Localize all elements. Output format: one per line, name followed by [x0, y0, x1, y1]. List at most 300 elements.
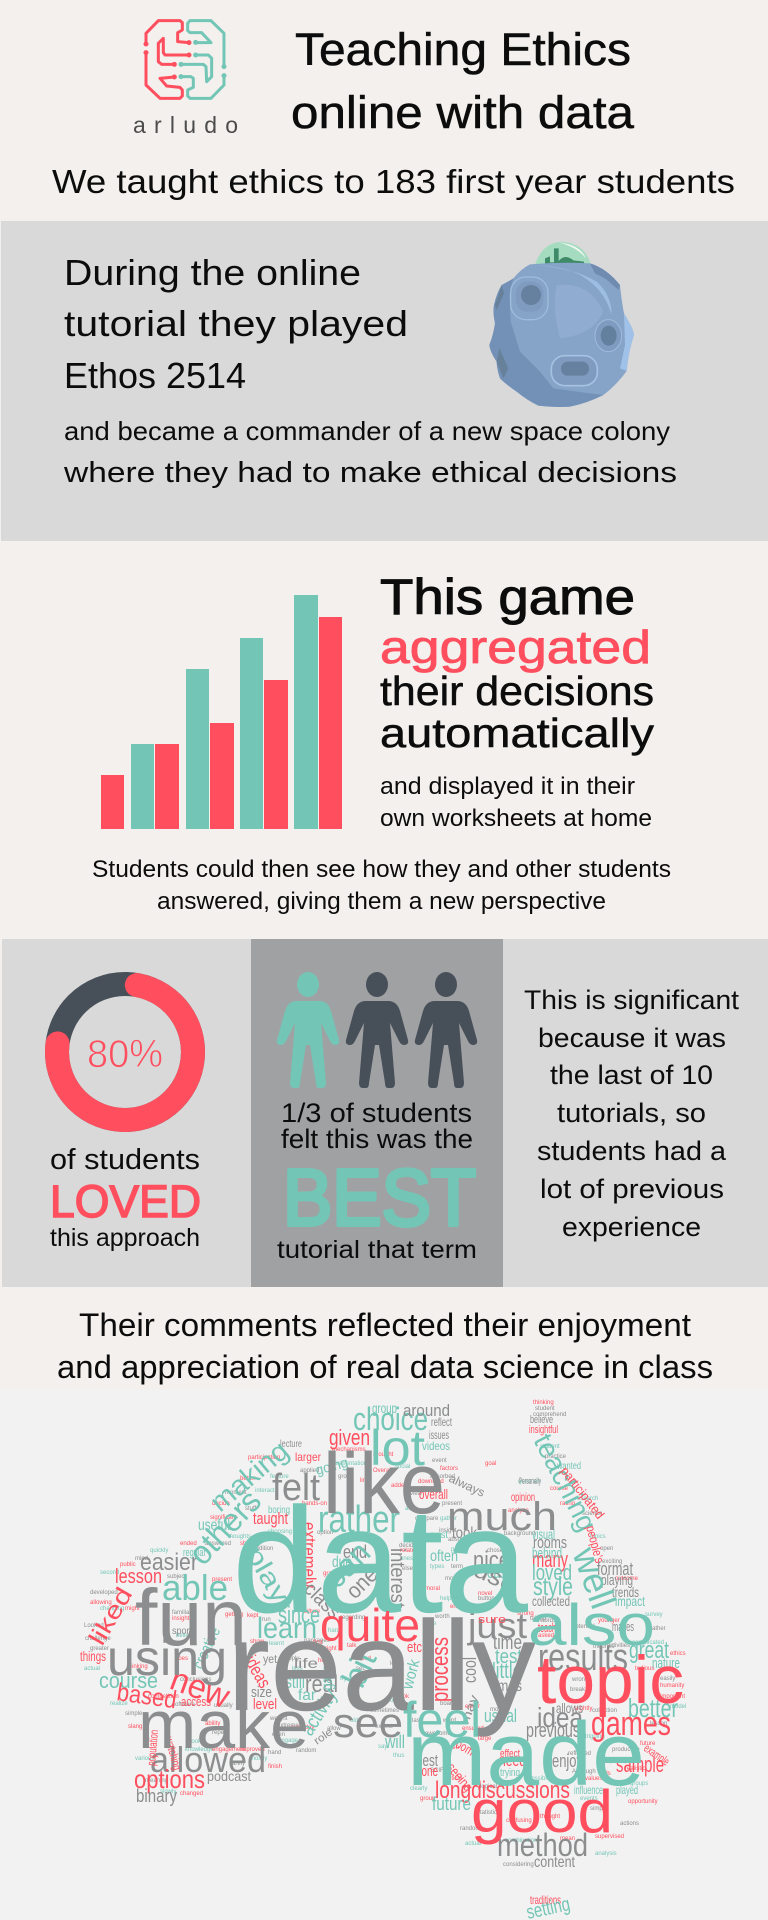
- word cloud: small filler words: challenge: [85, 1636, 111, 1642]
- word cloud: medium words: method: [497, 1827, 588, 1863]
- word cloud: rotated words: always: [447, 1471, 487, 1500]
- word cloud: small filler words: types: [430, 1564, 444, 1570]
- word cloud: medium words: little: [492, 1658, 522, 1683]
- word cloud: small filler words: download: [418, 1479, 444, 1485]
- word cloud: small filler words: course: [550, 1486, 569, 1492]
- word cloud: medium words: just: [467, 1605, 527, 1646]
- word cloud: rotated words: example: [641, 1741, 672, 1769]
- word cloud: small filler words: important: [660, 1694, 685, 1700]
- word cloud: small filler words: absorbed: [448, 1537, 473, 1543]
- word cloud: medium words: felt: [272, 1467, 320, 1509]
- word cloud: small filler words: moral: [445, 1576, 460, 1582]
- word cloud: small filler words: statistics: [477, 1810, 500, 1816]
- word cloud: small filler words: stuff: [245, 1506, 257, 1512]
- word cloud: medium words: content: [534, 1854, 575, 1871]
- word cloud: small filler words: insights: [172, 1616, 192, 1622]
- word cloud: large words: like: [323, 1436, 445, 1532]
- word cloud: small filler words: slightly: [574, 1706, 592, 1712]
- word cloud: small filler words: engagement: [212, 1747, 246, 1753]
- word cloud: small filler words: talk: [347, 1643, 357, 1649]
- word cloud: medium words: podcast: [207, 1768, 251, 1784]
- word cloud: small filler words: various: [135, 1756, 154, 1762]
- word cloud: small filler words: random: [296, 1748, 316, 1754]
- word cloud: small filler words: graphs: [323, 1571, 341, 1577]
- title: [291, 24, 635, 138]
- panel: word cloud: [0, 1390, 768, 1920]
- word cloud: medium words: taught: [253, 1509, 288, 1528]
- word cloud: small filler words: clearly: [410, 1786, 427, 1792]
- word cloud: small filler words: show: [250, 1639, 265, 1645]
- word cloud: small filler words: extreme: [277, 1723, 299, 1729]
- title: Teaching Ethics: [295, 24, 631, 75]
- word cloud: medium words: trends: [612, 1584, 639, 1600]
- text: students could then see: [92, 856, 671, 915]
- word cloud: small filler words: thus: [393, 1753, 404, 1759]
- word cloud: small filler words: choosing: [268, 1529, 292, 1535]
- word cloud: medium words: traditions: [530, 1893, 561, 1907]
- word cloud: small filler words: mind: [135, 1556, 148, 1562]
- word cloud: rotated words: ideas: [241, 1652, 275, 1691]
- word cloud: small filler words: interact: [255, 1488, 275, 1494]
- word cloud: small filler words: goal: [485, 1461, 496, 1467]
- subtitle: We taught ethics to 183 first year students: [52, 163, 735, 200]
- word cloud: medium words: options: [134, 1764, 205, 1794]
- word cloud: small filler words: complicated: [632, 1640, 664, 1646]
- word cloud: small filler words: slowly: [160, 1789, 176, 1795]
- word cloud: small filler words: kind: [360, 1656, 371, 1662]
- word cloud: small filler words: packages: [304, 1638, 330, 1644]
- word cloud: medium words: future: [432, 1794, 471, 1814]
- word cloud: small filler words: hard: [328, 1628, 340, 1634]
- word cloud: rotated words: interest: [386, 1548, 408, 1608]
- word cloud: small filler words: student: [535, 1406, 555, 1412]
- word cloud: small filler words: event: [432, 1458, 447, 1464]
- word cloud: medium words: time: [493, 1632, 522, 1654]
- word cloud: medium words: loved: [532, 1560, 572, 1585]
- word cloud: small filler words: Overall: [373, 1468, 392, 1474]
- word cloud: small filler words: social: [395, 1464, 410, 1470]
- word cloud: small filler words: combination: [505, 1838, 537, 1844]
- word cloud: medium words: insightful: [529, 1424, 558, 1436]
- word cloud: small filler words: asked: [538, 1633, 554, 1639]
- word cloud: small filler words: break: [570, 1687, 586, 1693]
- word cloud: large words: really: [227, 1595, 536, 1738]
- text: commander of a new space colony: [63, 416, 677, 489]
- word cloud: small filler words: hand: [268, 1750, 281, 1756]
- text: significance note: experience: [562, 1212, 701, 1242]
- word cloud: rotated words: class: [299, 1578, 345, 1623]
- word cloud: small filler words: novel: [478, 1591, 492, 1597]
- word cloud: small filler words: answered: [205, 1541, 231, 1547]
- word cloud: medium words: playing: [601, 1572, 633, 1589]
- word cloud: small filler words: Intriguing: [580, 1734, 605, 1740]
- word cloud: medium words: past: [430, 1530, 448, 1541]
- word cloud: medium words: reflect: [431, 1415, 452, 1429]
- word cloud: small filler words: brought: [373, 1452, 394, 1458]
- word cloud: small filler words: events: [580, 1796, 598, 1802]
- word cloud: small filler words: practice: [545, 1454, 567, 1460]
- word cloud: small filler words: awesome: [425, 1731, 451, 1737]
- word cloud: small filler words: kept: [247, 1613, 259, 1619]
- text: commander of a new space colony: where they had to make ethical decisions: [63, 457, 677, 489]
- word cloud: medium words: end: [343, 1542, 367, 1562]
- word cloud: small filler words: opportunity: [628, 1799, 658, 1805]
- bar chart: [101, 595, 342, 829]
- word cloud: rotated words: one: [341, 1562, 383, 1604]
- word cloud: small filler words: feature: [270, 1474, 289, 1480]
- word cloud: medium words: format: [597, 1559, 633, 1579]
- panel: Ethos 2514 game: [1, 221, 768, 541]
- word cloud: rotated words: extremely: [299, 1522, 319, 1588]
- word cloud: small filler words: greater: [90, 1646, 109, 1652]
- heading: this game aggregated: aggregated: [380, 621, 651, 673]
- word cloud: medium words: many: [532, 1547, 568, 1572]
- word cloud: small filler words: hear: [318, 1658, 330, 1664]
- word cloud: rotated words: going: [314, 1454, 350, 1478]
- word cloud: medium words: etc: [407, 1639, 422, 1656]
- word cloud: large words: feel: [403, 1692, 481, 1748]
- word cloud: small filler words: thinking: [127, 1664, 148, 1670]
- word cloud: medium words: lesson: [115, 1566, 162, 1588]
- word cloud: small filler words: sometimes: [370, 1708, 399, 1714]
- word cloud: small filler words: present: [442, 1501, 462, 1507]
- word cloud: small filler words: hands-on: [302, 1501, 327, 1507]
- word cloud: small filler words: ask: [405, 1506, 415, 1512]
- word cloud: small filler words: knowledge: [185, 1747, 214, 1753]
- panel: 80% loved: [2, 939, 251, 1287]
- word cloud: small filler words: changing: [100, 1606, 124, 1612]
- heading: this game aggregated: automatically: [380, 710, 655, 756]
- word cloud: small filler words: last: [412, 1718, 422, 1724]
- text: one third of students: [277, 1098, 477, 1264]
- word cloud: medium words: larger: [295, 1450, 321, 1464]
- word cloud: small filler words: group: [338, 1474, 354, 1480]
- word cloud: large words: lot: [370, 1420, 425, 1476]
- word cloud: small filler words: present: [212, 1577, 232, 1583]
- word cloud: medium words: group: [372, 1400, 397, 1416]
- word cloud: large words: topic: [537, 1642, 684, 1718]
- word cloud: medium words: videos: [422, 1439, 450, 1453]
- word cloud: small filler words: background: [504, 1531, 535, 1537]
- word cloud: small filler words: button: [478, 1596, 495, 1602]
- word cloud: small filler words: developed: [90, 1590, 118, 1596]
- word cloud: large words: much: [447, 1495, 557, 1539]
- word cloud: small filler words: applied: [300, 1468, 319, 1474]
- word cloud: medium words: rooms: [533, 1533, 567, 1552]
- word cloud: small filler words: try: [340, 1676, 347, 1682]
- word cloud: rotated words: watching: [162, 1734, 184, 1772]
- word cloud: large words: data: [232, 1476, 529, 1644]
- text: one third of students: 1/3 of students: [281, 1098, 472, 1128]
- word cloud: small filler words: ethics: [670, 1651, 686, 1657]
- word cloud: small filler words: question: [518, 1479, 541, 1485]
- text: one third of students: tutorial that term: [277, 1236, 477, 1264]
- word cloud: medium words: still: [285, 1672, 305, 1692]
- word cloud: small filler words: repeat: [212, 1730, 229, 1736]
- word cloud: small filler words: learnt: [269, 1641, 284, 1647]
- word cloud: small filler words: student: [540, 1444, 560, 1450]
- word cloud: small filler words: type: [425, 1621, 437, 1627]
- word cloud: medium words: issues: [429, 1428, 449, 1442]
- word cloud: small filler words: actual: [84, 1666, 100, 1672]
- word cloud: small filler words: compare: [415, 1516, 439, 1522]
- word cloud: rotated words: based: [115, 1678, 178, 1714]
- word cloud: small filler words: words: [539, 1618, 556, 1624]
- word cloud: rotated words: play: [240, 1541, 296, 1608]
- word cloud: small filler words: set.: [356, 1666, 366, 1672]
- text: students could then see: Students could then see how they and other students: [92, 856, 671, 883]
- word cloud: medium words: idea: [537, 1702, 583, 1733]
- word cloud: rotated words: may: [458, 1693, 481, 1726]
- word cloud: small filler words: quickly: [150, 1548, 168, 1554]
- word cloud: small filler words: participation: [248, 1455, 280, 1461]
- word cloud: small filler words: first: [313, 1640, 323, 1646]
- word cloud: small filler words: productive: [612, 1747, 640, 1753]
- word cloud: small filler words: slang: [128, 1724, 142, 1730]
- word cloud: small filler words: taking: [530, 1616, 546, 1622]
- text: of students loved this approach: this approach: [50, 1224, 200, 1252]
- word cloud: medium words: impact: [615, 1593, 645, 1609]
- word cloud: small filler words: decide: [212, 1501, 230, 1507]
- word cloud: rotated words: [84, 1429, 672, 1794]
- word cloud: small filler words: thoughts: [228, 1534, 251, 1540]
- word cloud: rotated words: making: [204, 1435, 294, 1518]
- word cloud: medium words: useful: [198, 1517, 230, 1534]
- word cloud: medium words: will: [384, 1732, 405, 1752]
- text: their comments: [57, 1307, 713, 1385]
- word cloud: medium words: [80, 1400, 680, 1920]
- word cloud: rotated words: cool: [460, 1657, 480, 1683]
- text: commander of a new space colony: and became a commander of a new space colony: [64, 416, 670, 446]
- word cloud: medium words: size: [251, 1684, 272, 1701]
- word cloud: small filler words: ended: [180, 1541, 197, 1547]
- word cloud: small filler words: everyday: [290, 1725, 314, 1731]
- word cloud: small filler words: ensured: [462, 1726, 484, 1732]
- word cloud: small filler words: public: [120, 1562, 136, 1568]
- word cloud: small filler words: link: [360, 1478, 370, 1484]
- word cloud: small filler words: goes: [175, 1656, 188, 1662]
- word cloud: rotated words: teaching: [528, 1429, 603, 1536]
- word cloud: medium words: sample: [616, 1752, 664, 1777]
- text: their comments: and appreciation of real data science in class: [57, 1349, 713, 1385]
- word cloud: rotated words: population: [144, 1729, 161, 1766]
- text: significance note: students had a: [537, 1136, 727, 1166]
- word cloud: small filler words: survey: [645, 1612, 663, 1618]
- word cloud: small filler words: improved: [240, 1747, 265, 1753]
- word cloud: medium words: great: [629, 1637, 669, 1664]
- text: of students loved this approach: LOVED: [50, 1176, 201, 1227]
- word cloud: small filler words: topics: [590, 1534, 606, 1540]
- word cloud: medium words: due: [332, 1554, 352, 1571]
- word cloud: small filler words: strong: [517, 1611, 534, 1617]
- word cloud: small filler words: might: [125, 1606, 140, 1612]
- word cloud: medium words: rather: [318, 1499, 400, 1541]
- text: of students loved this approach: [50, 1144, 201, 1252]
- logo: arludo: [133, 21, 238, 138]
- word cloud: small filler words: term: [451, 1564, 463, 1570]
- heading: this game aggregated: This game: [380, 569, 635, 625]
- word cloud: medium words: better: [628, 1693, 678, 1723]
- word cloud: small filler words: younger: [598, 1618, 620, 1624]
- icon: three people: [277, 972, 477, 1088]
- word cloud: small filler words: decide: [399, 1543, 417, 1549]
- word cloud: small filler words: exciting: [602, 1559, 622, 1565]
- word cloud: small filler words: competition: [148, 1694, 179, 1700]
- word cloud: medium words: nice: [473, 1547, 510, 1574]
- word cloud: large words: made: [407, 1705, 645, 1805]
- word cloud: small filler words: gather: [440, 1516, 457, 1522]
- word cloud: small filler words: either: [465, 1704, 480, 1710]
- word cloud: rotated words: well: [564, 1541, 624, 1614]
- panel: this is significant: [503, 939, 768, 1287]
- word cloud: rotated words: can: [316, 1534, 377, 1595]
- word cloud: small filler words: expect: [375, 1724, 393, 1730]
- word cloud: small filler words: look: [398, 1694, 410, 1700]
- heading: during the online tutorial: [64, 252, 408, 396]
- word cloud: small filler words: meaning: [145, 1778, 168, 1784]
- word cloud: small filler words: significant: [210, 1515, 237, 1521]
- word cloud: small filler words: regarding: [340, 1615, 365, 1621]
- text: significance note: [524, 985, 740, 1242]
- word cloud: small filler words: better: [240, 1476, 255, 1482]
- word cloud: small filler words: chose: [487, 1548, 504, 1554]
- text: displayed in worksheets: [380, 773, 652, 832]
- word cloud: small filler words: realistic: [625, 1766, 645, 1772]
- word cloud: small filler words: point: [610, 1758, 623, 1764]
- word cloud: medium words: choice: [353, 1401, 428, 1437]
- word cloud: rotated words: activity: [297, 1686, 342, 1740]
- word cloud: medium words: level: [253, 1696, 277, 1713]
- text: displayed in worksheets: and displayed it in their: [380, 773, 635, 800]
- word cloud: medium words: longdiscussions: [435, 1777, 570, 1804]
- text: students could then see: answered, giving them a new perspective: [157, 888, 606, 915]
- word cloud: small filler words: lesson: [650, 1721, 667, 1727]
- word cloud: large words: make: [138, 1687, 309, 1763]
- donut chart: 80%: 80%: [87, 1033, 163, 1076]
- word cloud: large words: also: [528, 1593, 655, 1658]
- word cloud: rotated words: room: [450, 1735, 477, 1759]
- word cloud: small filler words: second: [100, 1570, 119, 1576]
- icon: asteroid colony: [489, 242, 634, 407]
- word cloud: small filler words: logical: [480, 1784, 497, 1790]
- word cloud: large words: [107, 1420, 684, 1845]
- word cloud: medium words: given: [329, 1425, 370, 1450]
- word cloud: small filler words: collection: [592, 1708, 617, 1714]
- word cloud: small filler words: science: [582, 1511, 603, 1517]
- word cloud: medium words: allowed: [150, 1739, 266, 1780]
- text: of students loved this approach: of students: [50, 1144, 200, 1176]
- word cloud: medium words: often: [430, 1548, 458, 1565]
- word cloud: medium words: since: [278, 1602, 320, 1629]
- word cloud: small filler words: run: [262, 1617, 271, 1623]
- word cloud: medium words: makes: [612, 1619, 634, 1634]
- word cloud: medium words: around: [403, 1401, 450, 1420]
- word cloud: medium words: wanted: [556, 1461, 581, 1472]
- word cloud: small filler words: considering: [503, 1862, 534, 1868]
- word cloud: small filler words: comprehend: [533, 1412, 566, 1418]
- word cloud: small filler words: familiar: [172, 1610, 191, 1616]
- word cloud: medium words: boring: [268, 1505, 290, 1516]
- word cloud: rotated words: others: [181, 1482, 268, 1572]
- word cloud: small filler words: outcome: [615, 1576, 639, 1582]
- word cloud: small filler words: moment: [225, 1490, 247, 1496]
- word cloud: small filler words: group: [420, 1796, 436, 1802]
- text: one third of students: felt this was the: [281, 1124, 473, 1154]
- word cloud: medium words: collected: [532, 1593, 570, 1609]
- word cloud: small filler words: Looked: [84, 1623, 104, 1629]
- word cloud: rotated words: participated: [558, 1464, 608, 1522]
- word cloud: small filler words: actual: [465, 1841, 481, 1847]
- word cloud: small filler words: even: [272, 1732, 285, 1738]
- word cloud: rotated words: liked: [84, 1583, 138, 1650]
- word cloud: small filler words: ones: [400, 1556, 413, 1562]
- word cloud: medium words: sure: [478, 1614, 506, 1626]
- word cloud: small filler words: allow: [327, 1726, 341, 1732]
- word cloud: medium words: trying: [500, 1767, 520, 1779]
- word cloud: medium words: effect: [500, 1748, 520, 1760]
- word cloud: large words: using: [107, 1630, 227, 1686]
- word cloud: medium words: access: [181, 1694, 211, 1709]
- word cloud: small filler words: theories: [593, 1644, 614, 1650]
- word cloud: small filler words: mechanisms: [332, 1447, 366, 1453]
- word cloud: small filler words: analyze: [508, 1508, 529, 1514]
- text: significance note: the last of 10: [550, 1060, 713, 1090]
- word cloud: small filler words: sharing: [240, 1541, 260, 1547]
- word cloud: rotated words: role: [312, 1726, 335, 1747]
- word cloud: small filler words: changed: [180, 1791, 203, 1797]
- word cloud: small filler words: [84, 1400, 686, 1868]
- word cloud: large words: fun: [135, 1573, 247, 1662]
- word cloud: medium words: need: [499, 1751, 526, 1770]
- heading: this game aggregated: [380, 569, 655, 756]
- word cloud: medium words: able: [162, 1567, 228, 1608]
- word cloud: small filler words: factors: [440, 1466, 458, 1472]
- word cloud: small filler words: wrong: [571, 1677, 588, 1683]
- word cloud: rotated words: seeing: [444, 1760, 477, 1794]
- word cloud: small filler words: random: [460, 1826, 480, 1832]
- word cloud: small filler words: subject: [167, 1574, 186, 1580]
- word cloud: small filler words: added: [391, 1483, 408, 1489]
- word cloud: medium words: far: [298, 1687, 317, 1704]
- word cloud: medium words: easy: [487, 1563, 512, 1582]
- word cloud: small filler words: beliefs: [176, 1633, 193, 1639]
- panel: one third best tutorial: [251, 939, 503, 1287]
- word cloud: medium words: previous: [526, 1720, 580, 1742]
- word cloud: small filler words: option: [317, 1530, 333, 1536]
- word cloud: small filler words: culture: [302, 1609, 321, 1615]
- donut chart: 80%: [46, 973, 204, 1131]
- word cloud: small filler words: reflected: [568, 1751, 591, 1757]
- word cloud: small filler words: tradition: [252, 1546, 273, 1552]
- word cloud: medium words: allows: [556, 1700, 583, 1716]
- word cloud: small filler words: rather: [650, 1626, 666, 1632]
- word cloud: medium words: behind: [532, 1545, 562, 1562]
- word cloud: small filler words: groups: [630, 1781, 648, 1787]
- word cloud: small filler words: weight: [269, 1716, 288, 1722]
- text: significance note: because it was: [538, 1023, 726, 1053]
- word cloud: medium words: test: [495, 1646, 522, 1668]
- text: one third of students: BEST: [283, 1153, 476, 1242]
- word cloud: medium words: see: [333, 1699, 403, 1746]
- word cloud: small filler words: thought: [540, 1814, 560, 1820]
- word cloud: small filler words: analysis: [595, 1851, 617, 1857]
- word cloud: medium words: best: [416, 1751, 438, 1770]
- word cloud: medium words: results: [538, 1637, 628, 1679]
- word cloud: small filler words: motion: [385, 1698, 403, 1704]
- word cloud: small filler words: Although: [572, 1769, 596, 1775]
- word cloud: medium words: enjoy: [552, 1751, 583, 1771]
- word cloud: small filler words: else: [402, 1566, 414, 1572]
